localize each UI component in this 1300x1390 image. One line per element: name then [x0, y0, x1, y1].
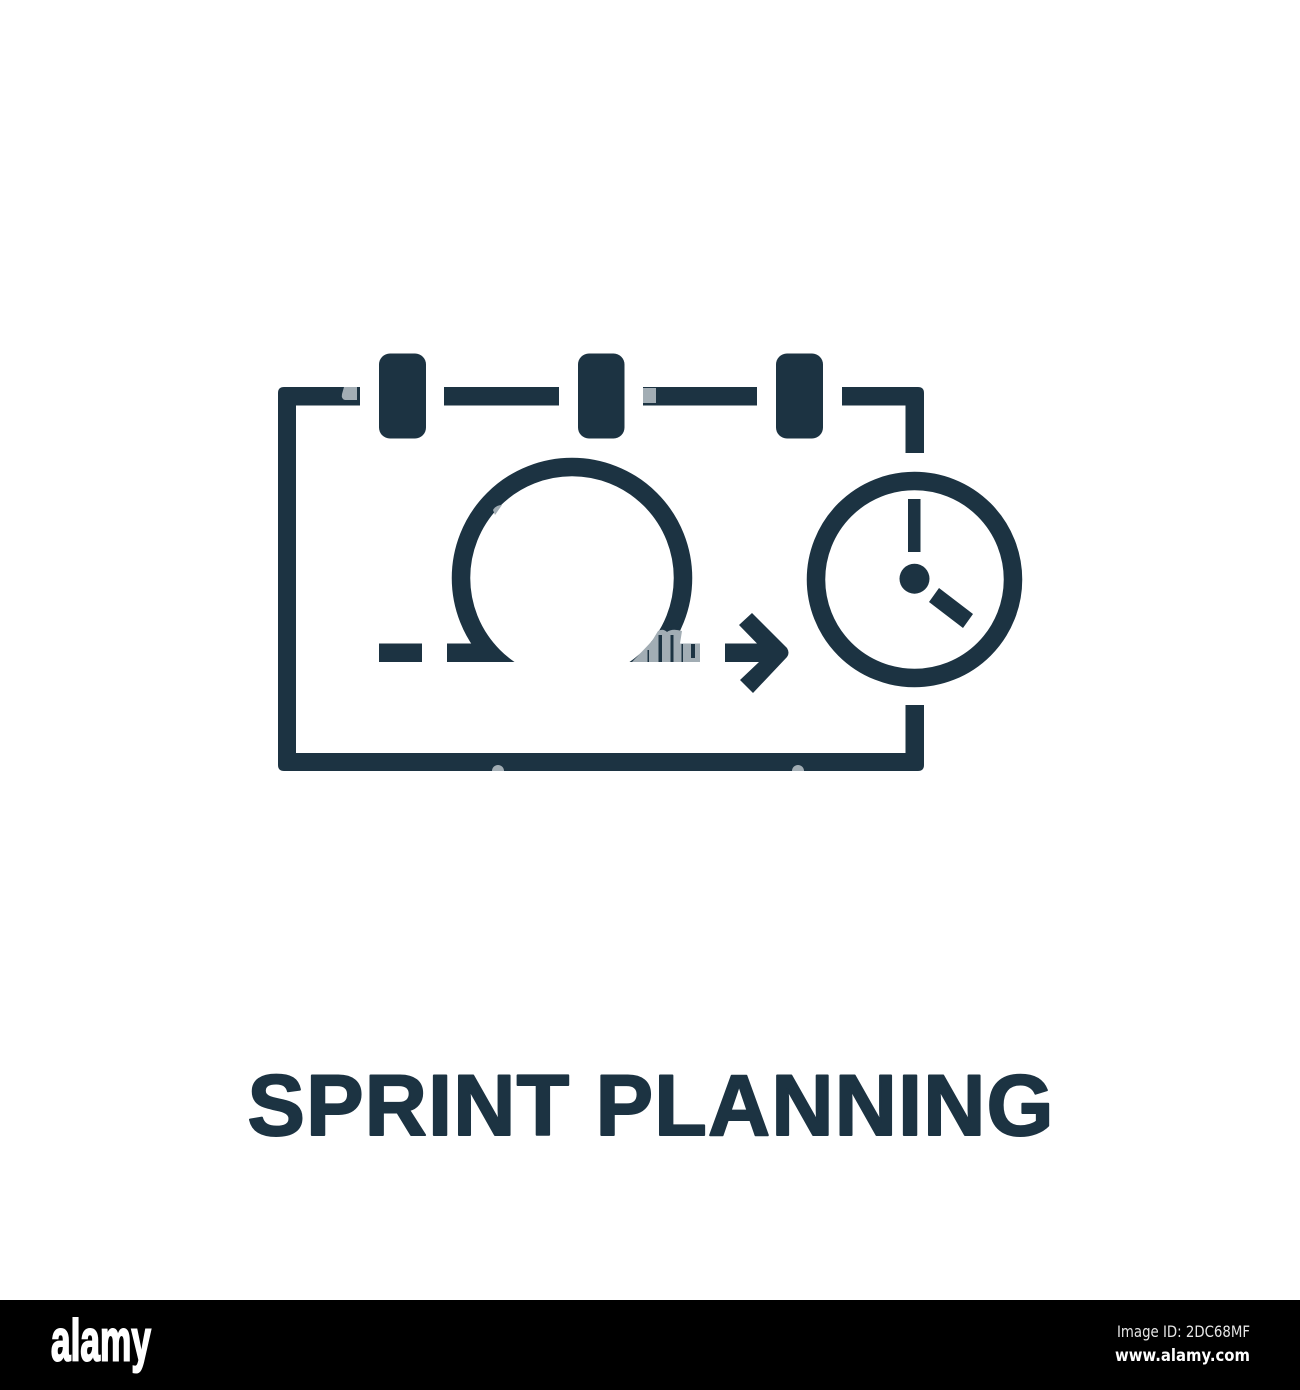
calendar binder rings	[379, 354, 823, 438]
infographic canvas	[0, 354, 1300, 1390]
clock	[816, 481, 1013, 678]
footer bar	[0, 1300, 1300, 1390]
image id: Image ID: 2DC68MF	[1117, 1322, 1250, 1341]
website: www.alamy.com	[1115, 1346, 1250, 1366]
icon: sprint planning calendar	[278, 354, 1013, 771]
alamy logo: alamy	[51, 1308, 151, 1374]
watermark artifacts on icon	[342, 387, 804, 771]
title: SPRINT PLANNING	[248, 1058, 1054, 1154]
calendar frame	[278, 387, 924, 771]
sprint loop arrow	[379, 467, 788, 693]
